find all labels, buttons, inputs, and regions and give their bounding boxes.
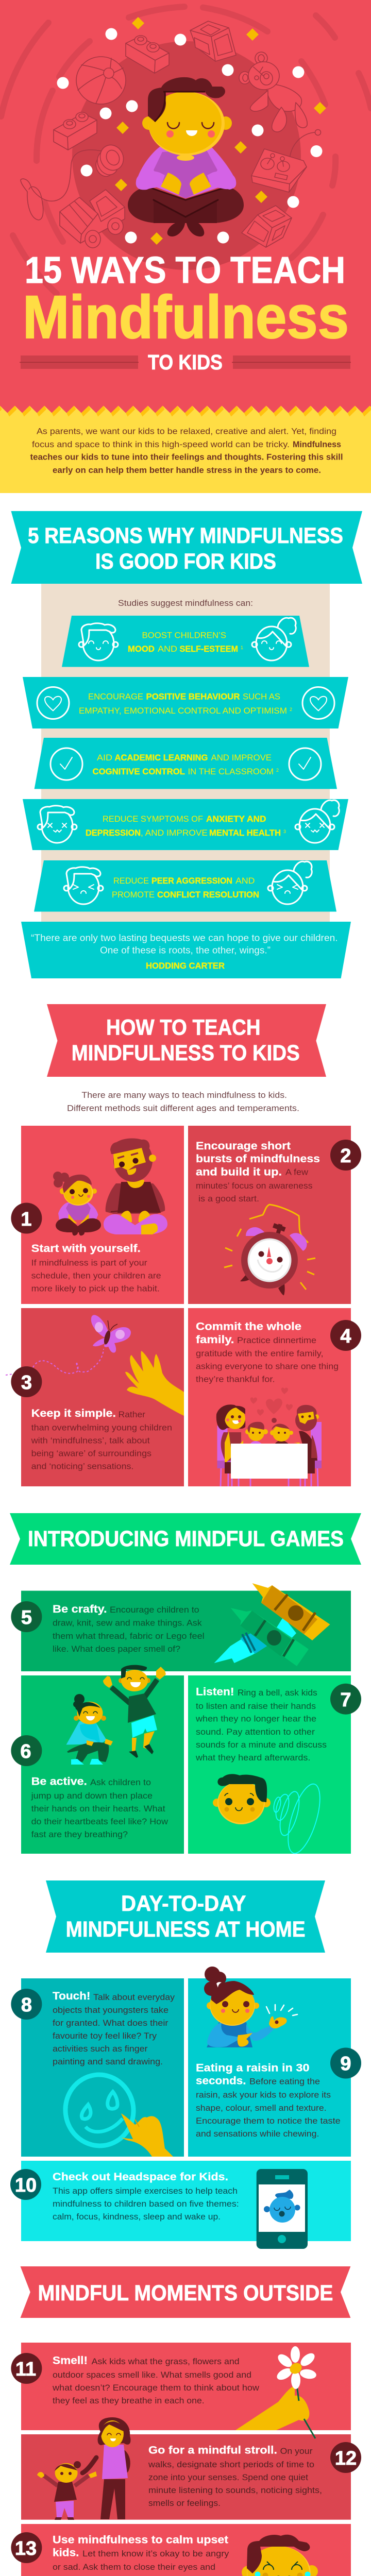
panel: card 6 be active bbox=[11, 1665, 184, 1854]
card 8 text bbox=[53, 1990, 175, 2066]
card 2 text: bursts of mindfulness bbox=[196, 1153, 320, 1165]
number badge 6 bbox=[11, 1735, 42, 1766]
heading banner: 5 reasons bbox=[11, 511, 362, 584]
card 12 text bbox=[148, 2445, 322, 2508]
illustration: jumping kids bbox=[66, 1665, 166, 1765]
text: how to teach intro: Different methods suit different ages and temperaments. bbox=[67, 1104, 299, 1113]
number badge 2: 2 bbox=[340, 1145, 351, 1167]
card 11 text: Smell! bbox=[53, 2354, 88, 2367]
card 13 text bbox=[53, 2534, 229, 2576]
card 3 text: Keep it simple. bbox=[31, 1408, 116, 1419]
number badge 11 bbox=[11, 2353, 42, 2384]
intro text: teaches our kids to tune into their feelings and thoughts. Fostering this skill bbox=[30, 452, 343, 462]
card 7 text: sound. Pay attention to other bbox=[196, 1727, 315, 1737]
text: how to teach intro bbox=[67, 1090, 299, 1113]
card 5 text: like. What does paper smell of? bbox=[53, 1644, 180, 1654]
benefit strip 1: 1 bbox=[241, 645, 243, 650]
benefit strip 5: PROMOTE bbox=[112, 890, 155, 900]
panel: card 12 mindful stroll bbox=[21, 2417, 361, 2520]
text: how to teach intro: There are many ways to teach mindfulness to kids. bbox=[81, 1090, 287, 1100]
card 4 text: Commit the whole bbox=[196, 1321, 301, 1332]
card 11 text bbox=[52, 2354, 260, 2405]
number badge 8: 8 bbox=[21, 1994, 32, 2016]
number badge 2 bbox=[330, 1140, 361, 1171]
card 2 text: A few bbox=[285, 1167, 309, 1177]
card 4 text: they’re thankful for. bbox=[196, 1374, 275, 1384]
benefit strip 4: ANXIETY AND bbox=[206, 815, 266, 824]
benefit strip 3: COGNITIVE CONTROL bbox=[93, 767, 185, 776]
number badge 10: 10 bbox=[15, 2175, 37, 2196]
benefit strip 5: REDUCE bbox=[113, 876, 149, 886]
card 6 text: Ask children to bbox=[90, 1777, 151, 1787]
card 6 text: Be active. bbox=[31, 1776, 87, 1788]
number badge 9: 9 bbox=[340, 2053, 351, 2075]
number badge 12: 12 bbox=[335, 2448, 357, 2469]
card 10 text: This app offers simple exercises to help teach bbox=[53, 2186, 238, 2196]
illustration: smiley drawing and finger bbox=[61, 2070, 173, 2157]
number badge 3 bbox=[11, 1366, 42, 1397]
benefit strip 3: AID bbox=[97, 753, 112, 762]
benefit strip 3: AND IMPROVE bbox=[211, 753, 272, 762]
card 6 text: fast are they breathing? bbox=[31, 1829, 128, 1839]
benefit strip 3: 2 bbox=[276, 768, 279, 773]
illustration: crying boy bbox=[226, 2535, 339, 2576]
illustration: crayons bbox=[214, 1583, 330, 1666]
card 12 text: Go for a mindful stroll. bbox=[148, 2445, 277, 2456]
illustration: meditating boy surrounded by toys bbox=[1, 7, 371, 294]
illustration: dad and daughter bbox=[53, 1138, 167, 1235]
card 10 text: mindfulness to children based on five themes: bbox=[53, 2199, 239, 2209]
number badge 5: 5 bbox=[21, 1607, 32, 1629]
benefit strip 4: REDUCE SYMPTOMS OF bbox=[103, 815, 203, 824]
card 6 text: jump up and down then place bbox=[31, 1791, 153, 1801]
card 12 text: On your bbox=[280, 2446, 313, 2456]
illustration: butterfly and hand bbox=[6, 1315, 184, 1416]
card 6 text: their hands on their hearts. What bbox=[31, 1804, 165, 1814]
heading banner: introducing mindful games: INTRODUCING MINDFUL GAMES bbox=[28, 1527, 344, 1551]
card 5 text: them what thread, fabric or Lego feel bbox=[53, 1631, 205, 1641]
benefit strip 4: 3 bbox=[283, 829, 286, 834]
card 11 text: Ask kids what the grass, flowers and bbox=[92, 2357, 240, 2366]
number badge 11: 11 bbox=[15, 2359, 36, 2380]
benefit strip 1 bbox=[62, 616, 309, 667]
number badge 10 bbox=[10, 2169, 41, 2200]
heading banner: introducing mindful games bbox=[10, 1513, 361, 1565]
heading banner: 5 reasons: 5 REASONS WHY MINDFULNESS bbox=[28, 523, 343, 548]
panel: quote: “There are only two lasting bequests we can hope to give our children. bbox=[31, 933, 338, 943]
card 1 text: If mindfulness is part of your bbox=[31, 1258, 147, 1267]
card 10 text bbox=[53, 2171, 239, 2222]
intro text bbox=[30, 427, 343, 475]
card 5 text bbox=[53, 1603, 205, 1654]
card 13 text: Let them know it’s okay to be angry bbox=[82, 2549, 229, 2558]
title: TO KIDS bbox=[148, 350, 223, 374]
benefit strip 3: IN THE CLASSROOM bbox=[188, 767, 274, 776]
card 4 text: Practice dinnertime bbox=[237, 1335, 316, 1345]
card 7 text bbox=[195, 1686, 327, 1762]
panel: card 11 smell bbox=[11, 2343, 351, 2430]
benefit strip 3: ACADEMIC LEARNING bbox=[114, 753, 208, 762]
number badge 4 bbox=[330, 1320, 361, 1351]
benefit strip 5: CONFLICT RESOLUTION bbox=[157, 890, 259, 900]
card 8 text: activities such as finger bbox=[53, 2044, 148, 2054]
benefit strip 2: EMPATHY, EMOTIONAL CONTROL AND OPTIMISM bbox=[79, 706, 287, 716]
panel: card 2 short bursts bbox=[188, 1126, 361, 1304]
panel: card 4 commit the whole family bbox=[188, 1308, 361, 1486]
card 9 text: shape, colour, smell and texture. bbox=[196, 2103, 327, 2113]
card 11 text: what doesn’t? Encourage them to think about how bbox=[52, 2383, 260, 2393]
card 8 text: painting and sand drawing. bbox=[53, 2057, 163, 2066]
intro text: Mindfulness bbox=[293, 439, 341, 449]
card 9 text: Encourage them to notice the taste bbox=[196, 2116, 341, 2126]
card 2 text: minutes’ focus on awareness bbox=[196, 1181, 312, 1191]
card 4 text bbox=[196, 1321, 339, 1384]
heading banner: 5 reasons: IS GOOD FOR KIDS bbox=[95, 549, 276, 574]
heading banner: how to teach bbox=[47, 1004, 326, 1077]
benefit strip 5: AND bbox=[235, 876, 255, 886]
card 12 text: walks, designate short periods of time to bbox=[148, 2460, 314, 2469]
benefit strip 3 bbox=[35, 738, 337, 789]
card 8 text: favourite toy feel like? Try bbox=[53, 2031, 157, 2041]
number badge 13: 13 bbox=[15, 2538, 37, 2560]
card 4 text: gratitude with the entire family, bbox=[196, 1349, 324, 1359]
number badge 9 bbox=[330, 2047, 361, 2078]
panel: quote bbox=[21, 922, 351, 978]
card 3 text: and ‘noticing’ sensations. bbox=[31, 1462, 133, 1471]
card 7 text: Listen! bbox=[196, 1686, 234, 1698]
card 1 text: more likely to pick up the habit. bbox=[31, 1284, 160, 1294]
intro text: early on can help them better handle stress in the years to come. bbox=[53, 465, 321, 475]
illustration: listening boy with sound waves bbox=[213, 1774, 326, 1857]
card 13 text: Use mindfulness to calm upset bbox=[53, 2534, 228, 2546]
card 8 text: objects that youngsters take bbox=[53, 2005, 168, 2015]
card 13 text: kids. bbox=[53, 2547, 79, 2559]
benefit strip 5 bbox=[34, 860, 336, 912]
card 8 text: Talk about everyday bbox=[93, 1992, 175, 2002]
number badge 7 bbox=[330, 1684, 361, 1715]
card 3 text bbox=[31, 1408, 172, 1471]
panel: studies background bbox=[41, 583, 330, 923]
illustration: alarm clock bbox=[224, 1205, 315, 1295]
number badge 3: 3 bbox=[21, 1372, 32, 1394]
card 5 text: Be crafty. bbox=[53, 1603, 107, 1615]
panel: quote: HODDING CARTER bbox=[146, 961, 225, 971]
illustration: girl with raisin bbox=[204, 1967, 297, 2047]
card 12 text: minute listening to sounds, noticing sights, bbox=[148, 2485, 322, 2495]
heading banner: how to teach: MINDFULNESS TO KIDS bbox=[72, 1041, 300, 1065]
card 2 text: Encourage short bbox=[196, 1140, 291, 1152]
card 9 text: Eating a raisin in 30 bbox=[196, 2062, 309, 2074]
number badge 5 bbox=[11, 1601, 42, 1632]
heading banner: how to teach: HOW TO TEACH bbox=[106, 1015, 261, 1040]
card 9 text: Before eating the bbox=[249, 2077, 320, 2087]
benefit strip 1: SELF-ESTEEM bbox=[179, 645, 238, 654]
benefit strip 5: PEER AGGRESSION bbox=[151, 876, 232, 886]
benefit strip 2: ENCOURAGE bbox=[88, 692, 143, 702]
panel: quote: One of these is roots, the other, wings.” bbox=[100, 945, 271, 955]
illustration: phone bbox=[257, 2169, 308, 2249]
card 7 text: Ring a bell, ask kids bbox=[238, 1688, 317, 1698]
card 6 text bbox=[31, 1776, 168, 1839]
number badge 1: 1 bbox=[21, 1209, 32, 1230]
card 12 text: smells or feelings. bbox=[148, 2498, 221, 2508]
card 3 text: Rather bbox=[119, 1410, 145, 1419]
card 13 text: or sad. Ask them to close their eyes and bbox=[53, 2562, 215, 2572]
card 5 text: draw, knit, sew and make things. Ask bbox=[53, 1618, 202, 1628]
card 7 text: what they heard afterwards. bbox=[195, 1753, 310, 1762]
number badge 13 bbox=[11, 2532, 42, 2563]
illustration: mother and child bbox=[37, 2417, 131, 2520]
intro text: focus and space to think in this high-speed world can be tricky. bbox=[32, 439, 290, 449]
card 1 text bbox=[31, 1243, 161, 1294]
benefit strip 4: MENTAL HEALTH bbox=[209, 828, 281, 838]
number badge 6: 6 bbox=[20, 1741, 31, 1762]
panel: card 10 headspace bbox=[10, 2161, 351, 2249]
illustration: hand holding flower bbox=[235, 2346, 317, 2438]
card 7 text: sounds for a minute and discuss bbox=[196, 1740, 327, 1750]
panel: card 3 keep it simple bbox=[6, 1308, 184, 1486]
benefit strip 2: SUCH AS bbox=[243, 692, 280, 702]
card 1 text: schedule, then your children are bbox=[31, 1270, 161, 1280]
number badge 4: 4 bbox=[340, 1326, 351, 1347]
card 3 text: with ‘mindfulness’, talk about bbox=[31, 1436, 150, 1446]
heading banner: day-to-day mindfulness bbox=[46, 1880, 325, 1953]
card 2 text: and build it up. bbox=[196, 1166, 282, 1178]
card 2 text bbox=[196, 1140, 320, 1204]
title bbox=[20, 250, 351, 374]
benefit strip 4: DEPRESSION bbox=[86, 828, 141, 838]
card 9 text: raisin, ask your kids to explore its bbox=[196, 2090, 331, 2100]
number badge 12 bbox=[330, 2442, 361, 2473]
panel: card 9 eating a raisin bbox=[188, 1967, 361, 2157]
panel: hero background bbox=[0, 0, 371, 407]
panel: card 8 touch bbox=[11, 1978, 184, 2157]
card 10 text: Check out Headspace for Kids. bbox=[53, 2171, 228, 2183]
card 3 text: than overwhelming young children bbox=[31, 1423, 172, 1432]
number badge 1 bbox=[11, 1202, 42, 1233]
card 4 text: family. bbox=[196, 1334, 234, 1346]
card 5 text: Encourage children to bbox=[110, 1605, 199, 1615]
panel: intro bbox=[0, 406, 371, 493]
card 9 text: seconds. bbox=[196, 2075, 246, 2087]
card 9 text: and sensations while chewing. bbox=[196, 2129, 319, 2139]
card 8 text: Touch! bbox=[53, 1990, 90, 2002]
heading banner: mindful moments outside: MINDFUL MOMENTS OUTSIDE bbox=[38, 2281, 333, 2306]
card 7 text: to listen and raise their hands bbox=[196, 1701, 316, 1711]
benefit strip 4: , AND IMPROVE bbox=[141, 828, 208, 838]
panel: card 13 calm upset kids bbox=[11, 2524, 351, 2576]
card 1 text: Start with yourself. bbox=[31, 1243, 141, 1255]
card 12 text: zone into your senses. Spend one quiet bbox=[148, 2472, 308, 2482]
panel: card 5 be crafty bbox=[11, 1583, 351, 1671]
card 11 text: outdoor spaces smell like. What smells good and bbox=[53, 2370, 251, 2380]
number badge 8 bbox=[11, 1989, 42, 2020]
panel: card 7 listen bbox=[188, 1675, 361, 1857]
benefit strip 2: POSITIVE BEHAVIOUR bbox=[146, 692, 240, 702]
card 10 text: calm, focus, kindness, sleep and wake up. bbox=[53, 2212, 221, 2222]
benefit strip 1: MOOD bbox=[128, 645, 155, 654]
text: studies suggest: Studies suggest mindfulness can: bbox=[118, 598, 253, 608]
number badge 7: 7 bbox=[340, 1689, 351, 1711]
heading banner: day-to-day mindfulness: MINDFULNESS AT HOME bbox=[66, 1917, 306, 1942]
title: Mindfulness bbox=[23, 283, 349, 351]
card 6 text: do their heartbeats feel like? How bbox=[31, 1817, 168, 1826]
intro text: As parents, we want our kids to be relaxed, creative and alert. Yet, finding bbox=[37, 427, 336, 436]
card 11 text: they feel as they breathe in each one. bbox=[53, 2396, 205, 2405]
title: 15 WAYS TO TEACH bbox=[25, 250, 345, 291]
heading banner: mindful moments outside bbox=[21, 2266, 350, 2318]
card 9 text bbox=[196, 2062, 341, 2139]
panel: card 1 start with yourself bbox=[11, 1126, 184, 1304]
heading banner: day-to-day mindfulness: DAY-TO-DAY bbox=[121, 1891, 246, 1916]
benefit strip 2: 2 bbox=[290, 707, 292, 712]
card 8 text: for granted. What does their bbox=[53, 2018, 168, 2028]
benefit strip 4 bbox=[23, 799, 348, 850]
benefit strip 1: AND bbox=[158, 645, 177, 654]
card 2 text: is a good start. bbox=[198, 1194, 259, 1204]
illustration: family at table bbox=[216, 1387, 322, 1486]
benefit strip 2 bbox=[23, 677, 348, 728]
card 4 text: asking everyone to share one thing bbox=[196, 1362, 339, 1371]
benefit strip 1: BOOST CHILDREN’S bbox=[142, 631, 226, 640]
card 3 text: being ‘aware’ of surroundings bbox=[31, 1449, 151, 1459]
card 7 text: when they no longer hear the bbox=[195, 1714, 316, 1724]
